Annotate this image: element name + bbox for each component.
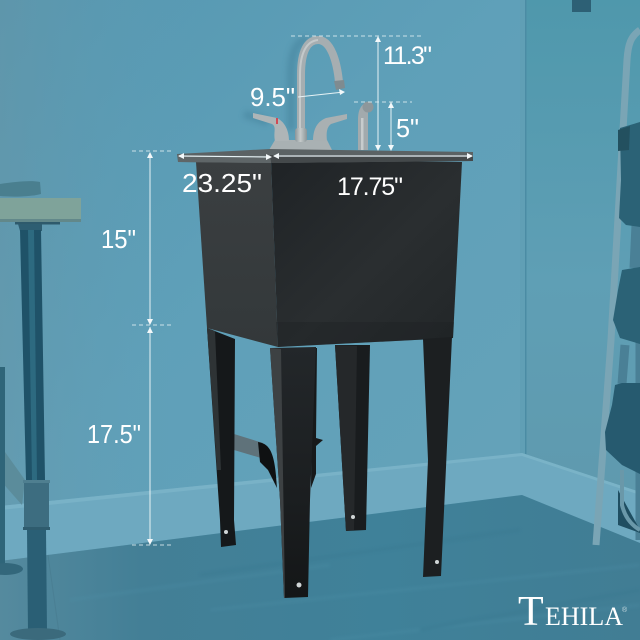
handles (253, 113, 289, 141)
side sprayer (358, 102, 368, 150)
sink tub (177, 149, 473, 347)
left table with pipe legs (0, 181, 81, 640)
dimension arrowheads (147, 36, 473, 545)
label: 23.25 inch: 23.25" (182, 168, 262, 198)
drain pipe (234, 434, 263, 458)
floor (0, 495, 640, 640)
right step ladder (596, 30, 640, 545)
brand logo: ® (622, 606, 628, 614)
faucet wall shadow (244, 40, 308, 130)
label: 15 inch: 15" (101, 224, 136, 254)
label: 5 inch: 5" (396, 113, 419, 143)
dimension lines (132, 36, 472, 545)
label: 9.5 inch: 9.5" (250, 82, 295, 112)
label: 17.5 inch: 17.5" (87, 419, 141, 449)
outlet (572, 0, 591, 12)
label: 17.75 inch: 17.75" (337, 173, 403, 201)
brand logo: EHILA (545, 602, 623, 631)
brand logo: T (518, 589, 544, 635)
baseboard (0, 453, 640, 561)
sink legs (207, 328, 452, 598)
faucet (244, 40, 374, 150)
label: 11.3 inch: 11.3" (383, 42, 432, 70)
brand logo (518, 589, 628, 635)
